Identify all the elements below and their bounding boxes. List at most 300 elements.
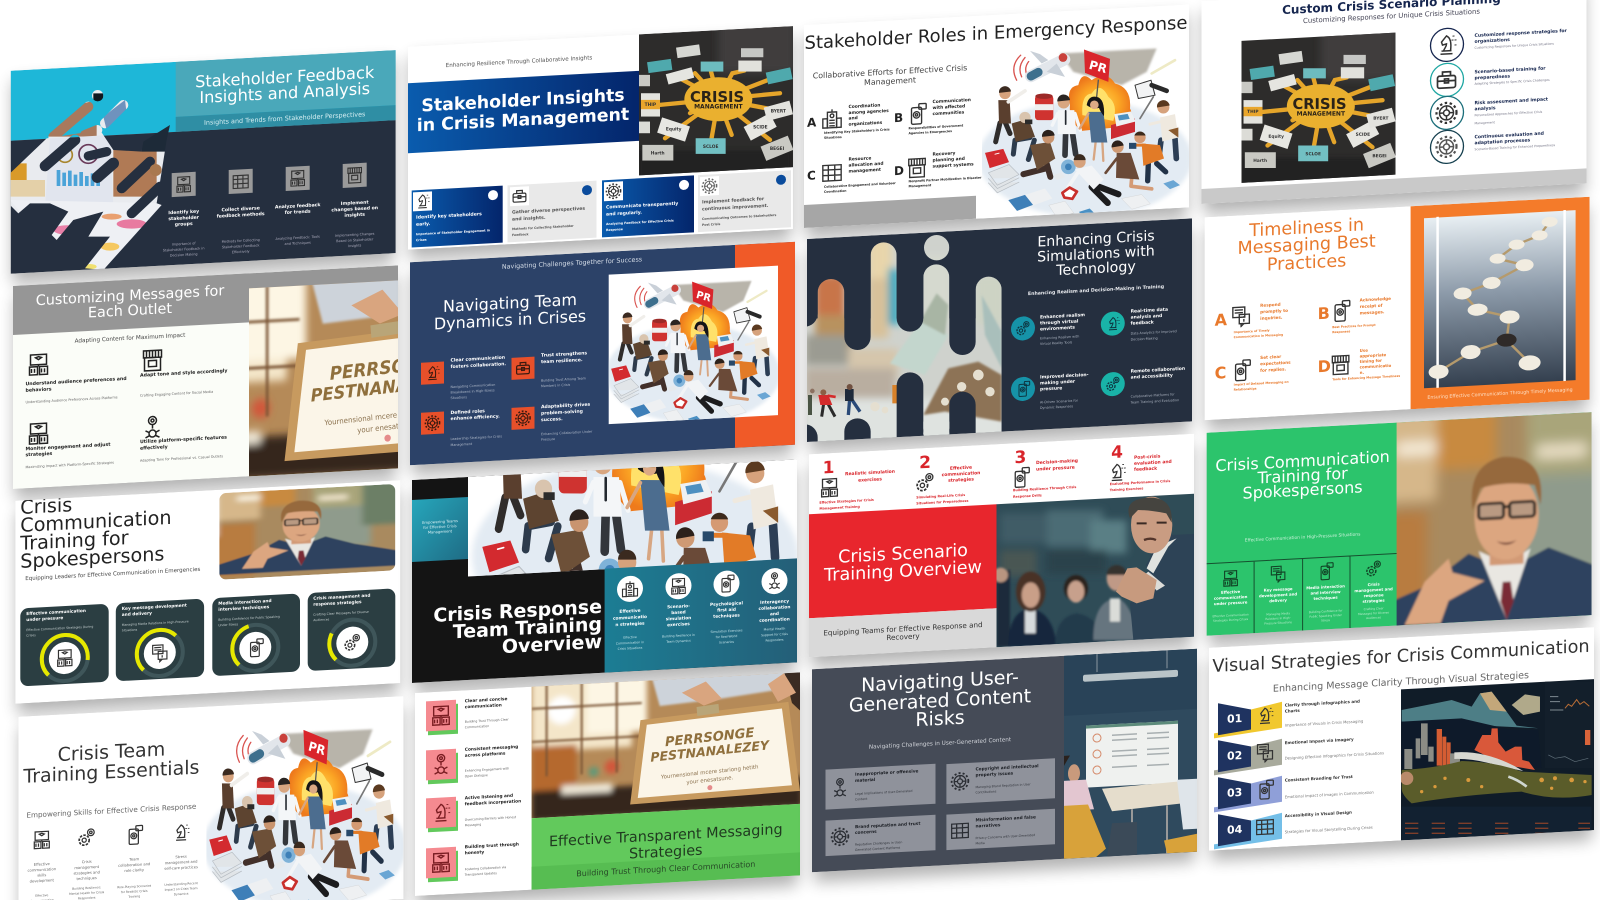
card: copyright: property issues [976,771,1014,779]
column: first aid: techniques [713,612,740,620]
green title panel: Effective Transparent Messaging [549,822,783,850]
panel: slide 7 Crisis Simulations [798,207,1192,467]
column: simulation: based [671,609,686,616]
item: roles: enhance efficiency. [451,413,500,422]
item: consistent messaging: Enhancing Engagement with [465,766,509,773]
step 2: Situations for Preparedness [916,499,968,506]
green title panel: Building Trust Through Clear Communication [576,860,755,878]
item D: D [1318,357,1331,376]
teal label: for Effective Crisis [423,524,457,530]
title: Crisis Team [58,738,165,766]
item A: and [849,115,858,122]
step 3 [1013,445,1078,499]
subtitle: Navigating Challenges in User-Generated Content [869,737,1012,751]
step 2: communication [942,470,980,478]
card: copyright: Contributions [976,789,997,795]
panel: slide 1 Stakeholder Feedback [3,50,396,304]
item A: organizations [849,120,883,128]
item: audience: Understand audience preferences and [26,376,127,387]
item D: n. [1360,370,1364,375]
step 2 [916,450,980,506]
item C: expectations [1260,360,1291,366]
title: Overview [502,631,602,658]
card: inappropriate: material [855,777,876,784]
item 02: Designing Effective Infographics for Crisis Situations [1285,750,1384,761]
title: Team Training [453,613,602,643]
photo: data dashboard landscape [1401,679,1594,840]
panel: slide 10 Crisis Response Team [412,290,834,732]
photo: spokesperson [202,474,414,582]
column 3: Team [128,857,139,862]
photo: pointing man [996,494,1194,648]
title: Training Essentials [22,757,199,788]
column 1: communication [1214,594,1248,601]
item: tone: Crafting Engaging Content for Social Media [140,390,213,398]
item B: messages. [1360,309,1385,316]
column 4: Impact on Crisis Team [165,886,198,892]
step 1: exercises [858,476,882,484]
item: platform: effectively [140,444,168,452]
green title panel [532,804,800,890]
green title panel: Strategies [629,843,703,863]
illustration: PR crisis [608,266,778,424]
subtitle: Empowering Skills for Effective Crisis Response [26,802,197,820]
item: decision-making: Improved decision- [1040,372,1089,381]
step 3: Decision-making [1036,458,1078,466]
item 04 [1214,806,1373,849]
item: collect methods: Methods for Collecting [222,238,260,244]
item: decision-making: Dynamic Responses [1040,404,1073,410]
subtitle: Insights and Trends from Stakeholder Perspectives [204,110,366,127]
card 1: Identify key stakeholders [416,211,482,221]
item: collect methods: Stakeholder Feedback [222,243,259,249]
photo: meeting room [1064,649,1197,859]
column: interagency: Support for Crisis [761,632,788,637]
column 4: Understanding Recent [164,881,199,887]
collage image [10,90,170,270]
column 2 [69,828,105,900]
card: media interaction: Under Stress [218,622,239,627]
card 4: continuous improvement. [702,203,769,212]
item 03: Emotional Impact of Images in Communication [1285,790,1374,799]
item A: among agencies [849,108,889,116]
item 04: Accessibility in Visual Design [1285,810,1352,818]
item C [808,157,896,193]
item 01: 01 [1227,712,1242,726]
column 3: Media interaction [1306,583,1345,590]
item A: Situations [824,135,842,140]
card 3: Analyzing Feedback for Effective Crisis [606,218,674,226]
card: misinformation: narratives [976,822,1001,830]
card: copyright: Managing Brand Reputation in User [976,782,1031,789]
column 1: Effective [35,893,48,898]
item C: Resource [849,155,871,163]
card: key message: and delivery [122,610,152,618]
column: communication: communicatio [613,614,647,622]
step 3: Building Resilience Through Crisis [1013,485,1076,492]
step 4: evaluation and [1134,459,1172,467]
item 2 [1430,62,1550,97]
item: audience [26,350,127,404]
item: virtual: Enhanced realism [1040,312,1085,321]
item: virtual: environments [1040,325,1075,333]
card 3: Response [606,227,623,232]
column 1: Effective [1221,589,1241,595]
item 04: Strategies for Visual Storytelling During Crises [1285,825,1373,834]
card: communication under pressure: Crises [26,633,36,638]
title: Technology [1055,259,1136,279]
teal label: Empowering Teams [422,519,458,525]
photo: spokesperson close-up [1396,412,1592,626]
item: platform [140,413,227,463]
column 2: techniques [77,876,97,881]
item 3: Personalized Approaches for Effective Crisis [1474,110,1543,117]
column: communication: Effective [623,635,637,640]
step 2: Simulating Real-Life Crisis [916,493,965,500]
item: tone: Adapt tone and style accordingly [140,368,227,379]
item B: Responsibilities of Government [908,123,964,130]
item: adaptability: Enhancing Collaboration Under [541,430,593,436]
item: virtual: Virtual Reality Tools [1040,340,1073,346]
item 2: Adapting Strategies to Specific Crisis Challenges [1474,78,1550,86]
card: brand reputation: Reputation Challenges in User- [855,840,903,847]
item 1: Customized response strategies for [1474,28,1568,39]
title banner [408,71,639,153]
item C: Relationships [1234,387,1257,392]
column 3 [117,825,152,899]
illustration crop [468,460,797,576]
item: building trust [426,841,519,882]
photo: crisis management [1242,32,1396,183]
step 2: strategies [948,476,974,484]
card: crisis management: Audiences [313,617,330,622]
item A [1215,301,1288,340]
item: implement changes: Implement [341,200,369,207]
item 04: 04 [1227,823,1243,837]
item: clear and concise: Clear and concise [465,696,507,704]
card: communication under pressure: Effective communication [26,608,86,617]
item 01: Charts [1285,708,1300,714]
column 4 [1354,560,1393,621]
column: first aid: Scenarios [719,640,734,645]
item 3: Management [1474,120,1496,125]
panel: slide 14 Transparent Messaging [415,651,822,900]
item: real-time [1101,306,1177,343]
item: building trust: honesty [465,849,484,856]
step 1 [819,455,895,511]
column: interagency: coordination [759,616,790,624]
column 1: under pressure [1214,600,1248,606]
title: Generated Content [849,685,1031,717]
column: communication: Crisis Situations [618,646,643,651]
item: audience: behaviors [26,386,52,394]
item: roles: Defined roles [451,408,485,416]
column 2: Key message [1264,586,1293,593]
item D: support systems [932,161,974,170]
photo: crisis management [639,26,793,176]
item 02: Emotional Impact via Imagery [1285,737,1354,745]
item: identify groups: groups [175,221,193,228]
item: remote: Collaborative Platforms for [1131,392,1175,399]
title: Risks [915,707,965,731]
step 4: 4 [1111,443,1123,463]
item: implement changes [331,162,378,249]
item: real-time: Real-time data [1131,307,1168,315]
panel: slide 9 Crisis Communication Training [15,474,414,714]
column 1: development [30,878,55,884]
item 01 [1214,695,1364,738]
title: Messaging Best [1238,232,1376,259]
title: Stakeholder Feedback [195,63,375,91]
item: remote: Remote collaboration [1131,366,1185,375]
item 1: organizations [1474,37,1510,45]
item: clear and concise: Communication [465,724,489,729]
item B: Best Practices for Prompt [1332,323,1376,329]
column 4: Messages for Diverse [1358,610,1389,616]
item A: Importance of Timely [1234,328,1270,334]
column: communication [613,575,647,651]
item 2: preparedness [1474,73,1510,81]
card 1: Crises [416,238,427,242]
item B: Responses [1332,329,1350,334]
item 03 [1214,769,1374,812]
item: identify groups: Identify key [168,209,199,216]
subtitle: Enhancing Realism and Decision-Making in Training [1028,284,1164,297]
item: trust: team resilience. [541,357,583,365]
column 3 [1306,562,1345,623]
item 4: adaptation processes [1474,137,1530,146]
card 2: and insights. [512,215,546,223]
item: collect methods: feedback methods [217,211,265,220]
card: inappropriate: Legal Implications of User-Generated [855,789,912,796]
subtitle: Effective Communication in High-Pressure Situations [1245,531,1361,544]
card: crisis management: Crafting Clear Messages for Diverse [313,610,369,617]
card: copyright [946,758,1055,804]
item: monitor [26,420,114,469]
column 3: role clarity [124,868,145,873]
card: misinformation: Misinformation and false [976,814,1036,824]
item A: Coordination [849,102,880,110]
item: collect methods: Effectively [232,249,250,254]
title: Crisis Scenario [838,541,968,568]
item B: Communication [932,97,971,105]
column 1: skills [37,873,46,878]
item B [1318,296,1391,335]
item: audience: Understanding Audience Preferences Across Platforms [26,395,118,404]
item: active listening: Overcoming Barriers with Honest [465,815,517,822]
step 3: 3 [1014,448,1026,468]
panel: slide 13 Crisis Team Essentials [18,674,428,900]
title: Navigating User- [861,666,1019,697]
card 2: Methods for Collecting Stakeholder [512,224,574,231]
step 1: 1 [823,458,835,479]
item: consistent messaging [426,744,518,784]
column 2: Crisis [82,860,92,864]
item: active listening [426,792,521,832]
column 3: Building Confidence for [1309,608,1343,614]
column 1: Strategies During Crises [1213,617,1249,623]
item: clear communication [421,355,506,402]
title: Timeliness in [1248,215,1364,241]
item: identify groups: Stakeholder Feedback in [163,246,205,253]
column 2: strategies and [73,870,100,876]
column 1 [28,831,57,900]
item C: Impact of Delayed Messaging on [1234,380,1289,387]
photo: sign board [249,280,398,476]
subtitle: Navigating Challenges Together for Success [502,255,643,271]
column 4: management and [1354,586,1393,593]
item: roles [421,407,502,449]
card 1: early. [416,221,431,228]
item A: A [1215,310,1228,330]
item D: Recovery [932,150,955,158]
panel: slide 6 Team Dynamics [410,237,799,475]
item: virtual [1011,312,1085,348]
item: adaptability: Pressure [541,437,555,442]
item: real-time: Data Analytics for Improved [1131,329,1177,336]
item: clear communication: Clear communication [451,355,505,364]
item: roles: Leadership Strategies for Crisis [451,434,502,441]
card: crisis management [308,588,395,678]
item: consistent messaging: Consistent messaging [465,744,518,753]
card 4 [698,170,791,232]
subtitle: Enhancing Message Clarity Through Visual Strategies [1273,670,1529,695]
item A: Respond [1260,302,1281,308]
item A [807,102,890,141]
title: Each Outlet [88,301,172,321]
item: building trust: Transparent Updates [464,871,497,877]
item: platform: Utilize platform-specific features [140,435,227,445]
item 03: 03 [1227,786,1242,800]
title: Dynamics in Crises [434,306,586,334]
item: analyze trends [275,165,321,247]
item B: B [1318,304,1330,323]
column 4 [164,824,199,897]
column 4: management and [165,860,197,865]
column 1 [1212,570,1249,623]
column: first aid: for Real-World [716,634,737,639]
item: remote: and accessibility [1131,372,1173,381]
card 4: Post Crisis [702,222,721,227]
item 02 [1214,731,1384,775]
title: Crisis Communication [1215,447,1390,475]
item: analyze trends: and Techniques [285,241,311,246]
item: trust: Trust strengthens [541,350,587,359]
item: collect methods: Collect diverse [222,205,260,213]
column: interagency: Interagency [760,598,789,606]
column 3: Training [127,894,140,899]
title: Practices [1267,251,1346,275]
item 03: Consistent Branding for Trust [1285,774,1353,783]
step 3: Response Drills [1013,493,1042,499]
item: remote [1101,366,1185,406]
card: misinformation [946,809,1055,850]
column: simulation [662,572,695,644]
step 4: Post-crisis [1134,453,1161,461]
item: adaptability: Adaptability drives [541,402,591,410]
card: communication under pressure: Effective Communication Strategies During [26,625,93,632]
teal label [412,497,468,562]
title: Spokespersons [20,542,164,573]
item 3: Risk assessment and impact [1474,96,1549,106]
title: Communication [20,506,172,537]
column: simulation: exercises [667,621,690,628]
item D: D [894,164,904,178]
column: communication: n strategies [615,621,645,628]
title: Simulations with [1037,243,1155,266]
subtitle: Equipping Teams for Effective Response and [823,620,983,638]
column: interagency: Responders [765,638,784,643]
step 2: 2 [919,453,931,473]
panel: slide 15 User-Generated Content [812,649,1197,882]
subtitle: Collaborative Efforts for Effective Crisis [813,63,967,81]
title banner: Stakeholder Insights [421,86,625,116]
item D: timing for [1360,358,1382,364]
column: interagency [759,567,790,643]
card: inappropriate [826,764,936,810]
title: Crisis [20,493,72,519]
card: misinformation: Privacy Concerns with User-Generated [976,833,1035,840]
item: identify groups [163,171,205,258]
column 1: Effective Communication [1212,612,1249,618]
item 2: Scenario-based training for [1474,66,1546,75]
item: analyze trends: for trends [285,209,311,216]
panel: slide 8 Timeliness [1205,197,1590,430]
card: key message: Key message development [122,603,187,612]
item: active listening: Active listening and [465,793,513,801]
panel: slide 16 Visual Strategies [1209,627,1600,866]
column 3: collaboration and [118,862,150,868]
item 1 [1430,28,1567,62]
column: simulation: Team Dynamics [665,639,691,644]
column: first aid [710,570,743,645]
item: clear communication: fosters collaboration. [451,361,506,370]
subtitle: Management [864,76,916,87]
panel: slide 11 Crisis Scenario Training [809,433,1203,678]
card 3: and regularly. [606,210,642,218]
item: identify groups: Importance of [172,241,196,247]
column 2: Managing Media [1266,611,1290,617]
card: key message [116,599,204,688]
item: active listening: feedback incorporation [465,798,521,807]
subtitle: Adapting Content for Maximum Impact [75,333,186,345]
card 2: Gather diverse perspectives [512,206,585,216]
card 3 [602,175,694,237]
item: collect methods [217,168,265,255]
illustration: PR crisis [982,47,1189,218]
subtitle: Enhancing Resilience Through Collaborative Insights [446,55,592,69]
column: simulation: simulation [666,615,691,622]
card 2: Feedback [512,232,530,237]
step 4: Evaluating Performance in Crisis [1110,479,1170,486]
column 2: Relations in High- [1265,616,1291,621]
illustration: PR crisis [206,728,403,900]
item 01: Clarity through infographics and [1285,699,1360,708]
item: consistent messaging: across platforms [465,751,506,759]
panel: slide 5 Customizing Messages [6,266,406,504]
item: implement changes: changes based on [331,205,378,214]
title: Spokespersons [1243,477,1363,503]
title: Insights and Analysis [199,79,370,107]
panel: slide 3 Stakeholder Roles [796,10,1196,244]
title: Visual Strategies for Crisis Communication [1212,637,1590,677]
item B: B [894,111,903,125]
item: analyze trends: Analyze feedback [275,202,321,211]
item B: with affected [932,103,965,111]
title: Customizing Messages for [36,283,224,309]
item C [1215,353,1291,393]
item: platform: Adapting Tone for Professional vs. Casual Outlets [140,454,223,463]
